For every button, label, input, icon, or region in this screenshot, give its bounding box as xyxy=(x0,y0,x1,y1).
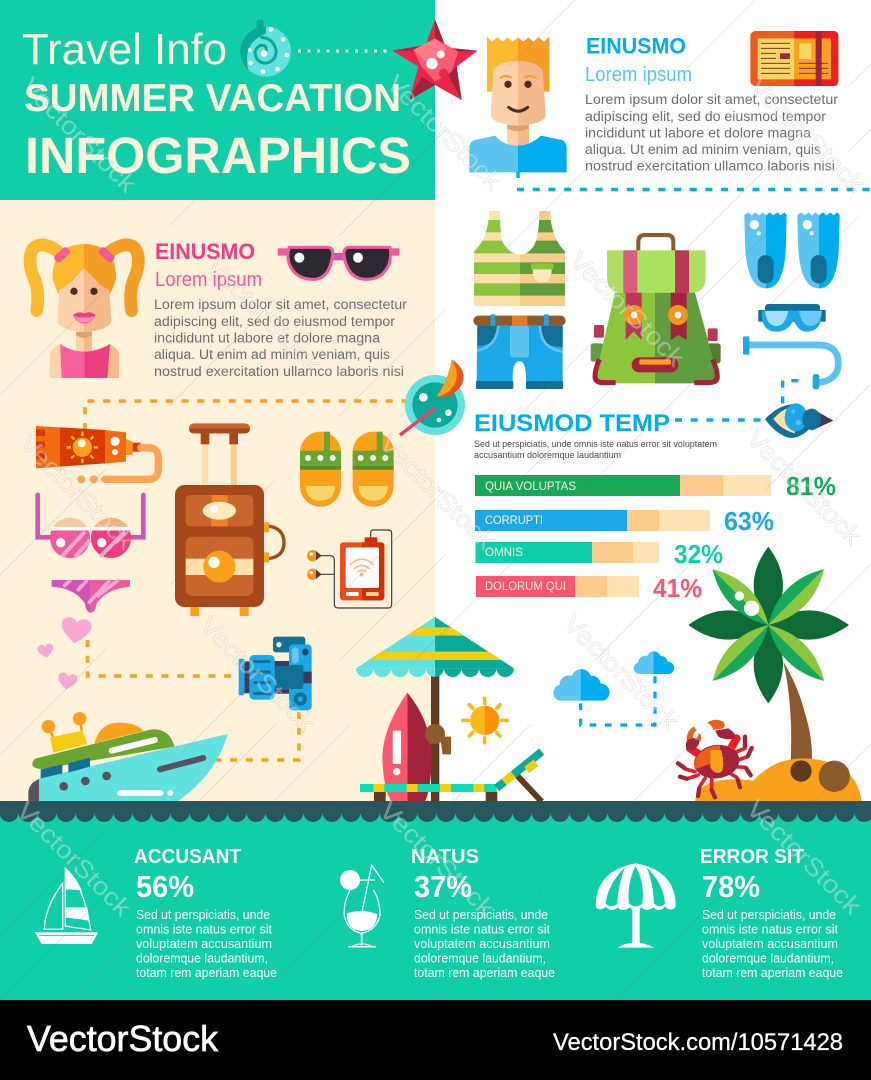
watermark overlay: VectorStock xyxy=(381,69,507,196)
text block: man paragraph: incididunt ut labore et dolore magna xyxy=(585,126,812,140)
icon: man avatar xyxy=(469,37,567,172)
icon: sunglasses xyxy=(278,247,399,279)
stat: natus xyxy=(411,846,555,980)
watermark overlay: VectorStock xyxy=(16,72,142,199)
bar: quia voluptas 81% xyxy=(475,471,836,501)
dashed connector hearts to camera xyxy=(88,640,235,676)
watermark overlay: VectorStock xyxy=(741,794,867,921)
stat: error sit: 78% xyxy=(702,869,760,904)
icon: denim shorts xyxy=(473,314,566,389)
heading: einusmo blue: EINUSMO xyxy=(586,34,686,58)
subheading: lorem ipsum blue: Lorem ipsum xyxy=(585,64,692,86)
icon: clouds xyxy=(553,651,674,725)
icon: tank top xyxy=(474,211,565,306)
stat: accusant: 56% xyxy=(136,869,194,904)
panel: bottom stats xyxy=(0,801,871,1000)
watermark overlay: VectorStock xyxy=(564,246,690,373)
stat: natus: doloremque laudantium, xyxy=(414,952,546,966)
watermark overlay: VectorStock xyxy=(741,424,867,551)
stat: error sit: voluptatem accusantium xyxy=(702,937,838,951)
icon: sun xyxy=(463,698,507,743)
panel: man profile xyxy=(469,31,871,189)
heading: eiusmod temp: EIUSMOD TEMP xyxy=(474,410,670,437)
text block: girl paragraph: aliqua. Ut enim ad minim veniam, quis xyxy=(154,347,390,362)
text block: girl paragraph: nostrud exercitation ullamco laboris nisi xyxy=(154,364,404,379)
icon: sun lounger xyxy=(360,752,542,802)
stat: error sit: omnis iste natus error sit xyxy=(702,922,839,936)
icon: beach umbrella xyxy=(356,617,514,802)
bar: quia voluptas 81%: 81% xyxy=(786,471,836,501)
watermark overlay: VectorStock xyxy=(374,796,500,923)
bar: corrupti 63% xyxy=(475,506,774,536)
icon: suitcase xyxy=(175,423,284,616)
text block: man paragraph: Lorem ipsum dolor sit amet, consectetur xyxy=(585,92,839,107)
wave border xyxy=(0,801,871,822)
watermark overlay: VectorStock xyxy=(194,611,320,738)
icon: flippers xyxy=(744,212,840,288)
watermark overlay: VectorStock xyxy=(744,72,870,199)
dashed connector snorkel to shell xyxy=(783,381,798,403)
bar: corrupti 63%: 63% xyxy=(724,506,774,536)
footer bar xyxy=(0,1000,871,1080)
stat: error sit: ERROR SIT xyxy=(700,846,804,868)
icon: umbrella xyxy=(596,863,676,948)
stat: accusant xyxy=(134,846,277,980)
stat: accusant: doloremque laudantium, xyxy=(136,952,268,966)
icon: surfboard xyxy=(382,693,451,802)
dotted connector xyxy=(298,50,392,52)
bar: quia voluptas 81%: QUIA VOLUPTAS xyxy=(485,479,576,493)
title: infographics: INFOGRAPHICS xyxy=(25,127,411,184)
bar: corrupti 63%: CORRUPTI xyxy=(485,513,543,527)
icon: snorkel xyxy=(743,336,838,389)
panel: cream left background xyxy=(0,200,435,801)
dashed connector orange top xyxy=(85,401,408,430)
stat: error sit: totam rem aperiam eaque xyxy=(702,966,843,980)
bar: dolorum qui 41% xyxy=(476,573,702,603)
text block: man paragraph: aliqua. Ut enim ad minim veniam, quis xyxy=(585,142,821,157)
stat: natus: voluptatem accusantium xyxy=(414,937,550,951)
stat: accusant: ACCUSANT xyxy=(134,846,241,868)
text block: man paragraph: adipiscing elit, sed do eiusmod tempor xyxy=(585,109,827,124)
dashed connector camera to boat xyxy=(215,712,299,760)
title: travel info: Travel Info xyxy=(22,25,227,74)
watermark overlay: VectorStock xyxy=(11,796,137,923)
icon: passport xyxy=(750,31,838,86)
stat: natus: Sed ut perspiciatis, unde xyxy=(414,908,548,922)
image url: VectorStock.com/10571428 xyxy=(553,1029,843,1056)
icon: bikini top xyxy=(38,495,143,558)
icon: crab xyxy=(678,720,752,797)
panel: girl profile xyxy=(30,239,408,379)
icon: palm tree on island xyxy=(688,547,862,802)
icon: spiral shell xyxy=(240,19,291,77)
icon: sea shell xyxy=(765,403,833,438)
icon: sailboat xyxy=(35,868,98,944)
stat: error sit: doloremque laudantium, xyxy=(702,952,834,966)
text block: man paragraph: nostrud exercitation ullamco laboris nisi xyxy=(585,158,835,174)
stat: natus: 37% xyxy=(414,869,472,904)
dashed connector title to shell xyxy=(675,418,762,422)
chart description: accusantium doloremque laudantium xyxy=(474,450,621,460)
text block: girl paragraph xyxy=(154,297,408,379)
stat: natus: NATUS xyxy=(411,846,479,868)
watermark overlay: VectorStock xyxy=(201,252,327,379)
watermark overlay: VectorStock xyxy=(374,429,500,556)
stat: natus: totam rem aperiam eaque xyxy=(414,966,555,980)
panel: header xyxy=(0,0,435,200)
watermark overlay: VectorStock xyxy=(558,609,684,736)
icon: camera xyxy=(239,637,312,710)
icon: diving mask xyxy=(758,304,826,332)
bar: omnis 32%: 32% xyxy=(674,539,723,569)
brand name: VectorStock xyxy=(27,1018,219,1059)
stat: accusant: omnis iste natus error sit xyxy=(136,922,273,936)
stat: error sit: Sed ut perspiciatis, unde xyxy=(702,908,836,922)
heading: einusmo pink: EINUSMO xyxy=(155,239,255,264)
icon: cocktail glass xyxy=(340,865,384,947)
title: summer vacation: SUMMER VACATION xyxy=(24,77,401,120)
icon: girl avatar xyxy=(30,244,138,378)
icon: backpack xyxy=(591,235,721,383)
bar: omnis 32% xyxy=(476,539,723,569)
text block: girl paragraph: adipiscing elit, sed do eiusmod tempor xyxy=(154,314,396,329)
stat: accusant: Sed ut perspiciatis, unde xyxy=(136,908,270,922)
chart description: Sed ut perspiciatis, unde omnis iste natus error sit voluptatem xyxy=(474,439,717,449)
text block: girl paragraph: Lorem ipsum dolor sit amet, consectetur xyxy=(154,297,408,312)
icon: fruit cocktail top view xyxy=(400,359,465,435)
stat: error sit xyxy=(700,846,843,980)
chart description xyxy=(474,439,717,460)
icon: flip flops xyxy=(300,432,394,507)
text block: man paragraph xyxy=(585,92,839,174)
bar: dolorum qui 41%: 41% xyxy=(653,573,702,603)
panel: bar chart xyxy=(474,410,836,603)
subheading: lorem ipsum pink: Lorem ipsum xyxy=(155,269,262,291)
icon: music player with earphones xyxy=(307,530,392,608)
stat: accusant: voluptatem accusantium xyxy=(136,937,272,951)
icon: sunscreen tube xyxy=(36,426,158,483)
watermark overlay: VectorStock xyxy=(14,429,140,556)
icon: bikini bottom xyxy=(52,580,130,613)
icon: speed boat xyxy=(28,712,228,801)
stat: accusant: totam rem aperiam eaque xyxy=(136,966,277,980)
stat: natus: omnis iste natus error sit xyxy=(414,922,551,936)
bar: dolorum qui 41%: DOLORUM QUI xyxy=(485,579,566,593)
icon: hearts xyxy=(37,616,93,691)
dashed connector blue xyxy=(517,172,871,190)
text block: girl paragraph: incididunt ut labore et dolore magna xyxy=(154,330,381,346)
icon: starfish xyxy=(392,19,478,100)
bar: omnis 32%: OMNIS xyxy=(485,545,523,559)
